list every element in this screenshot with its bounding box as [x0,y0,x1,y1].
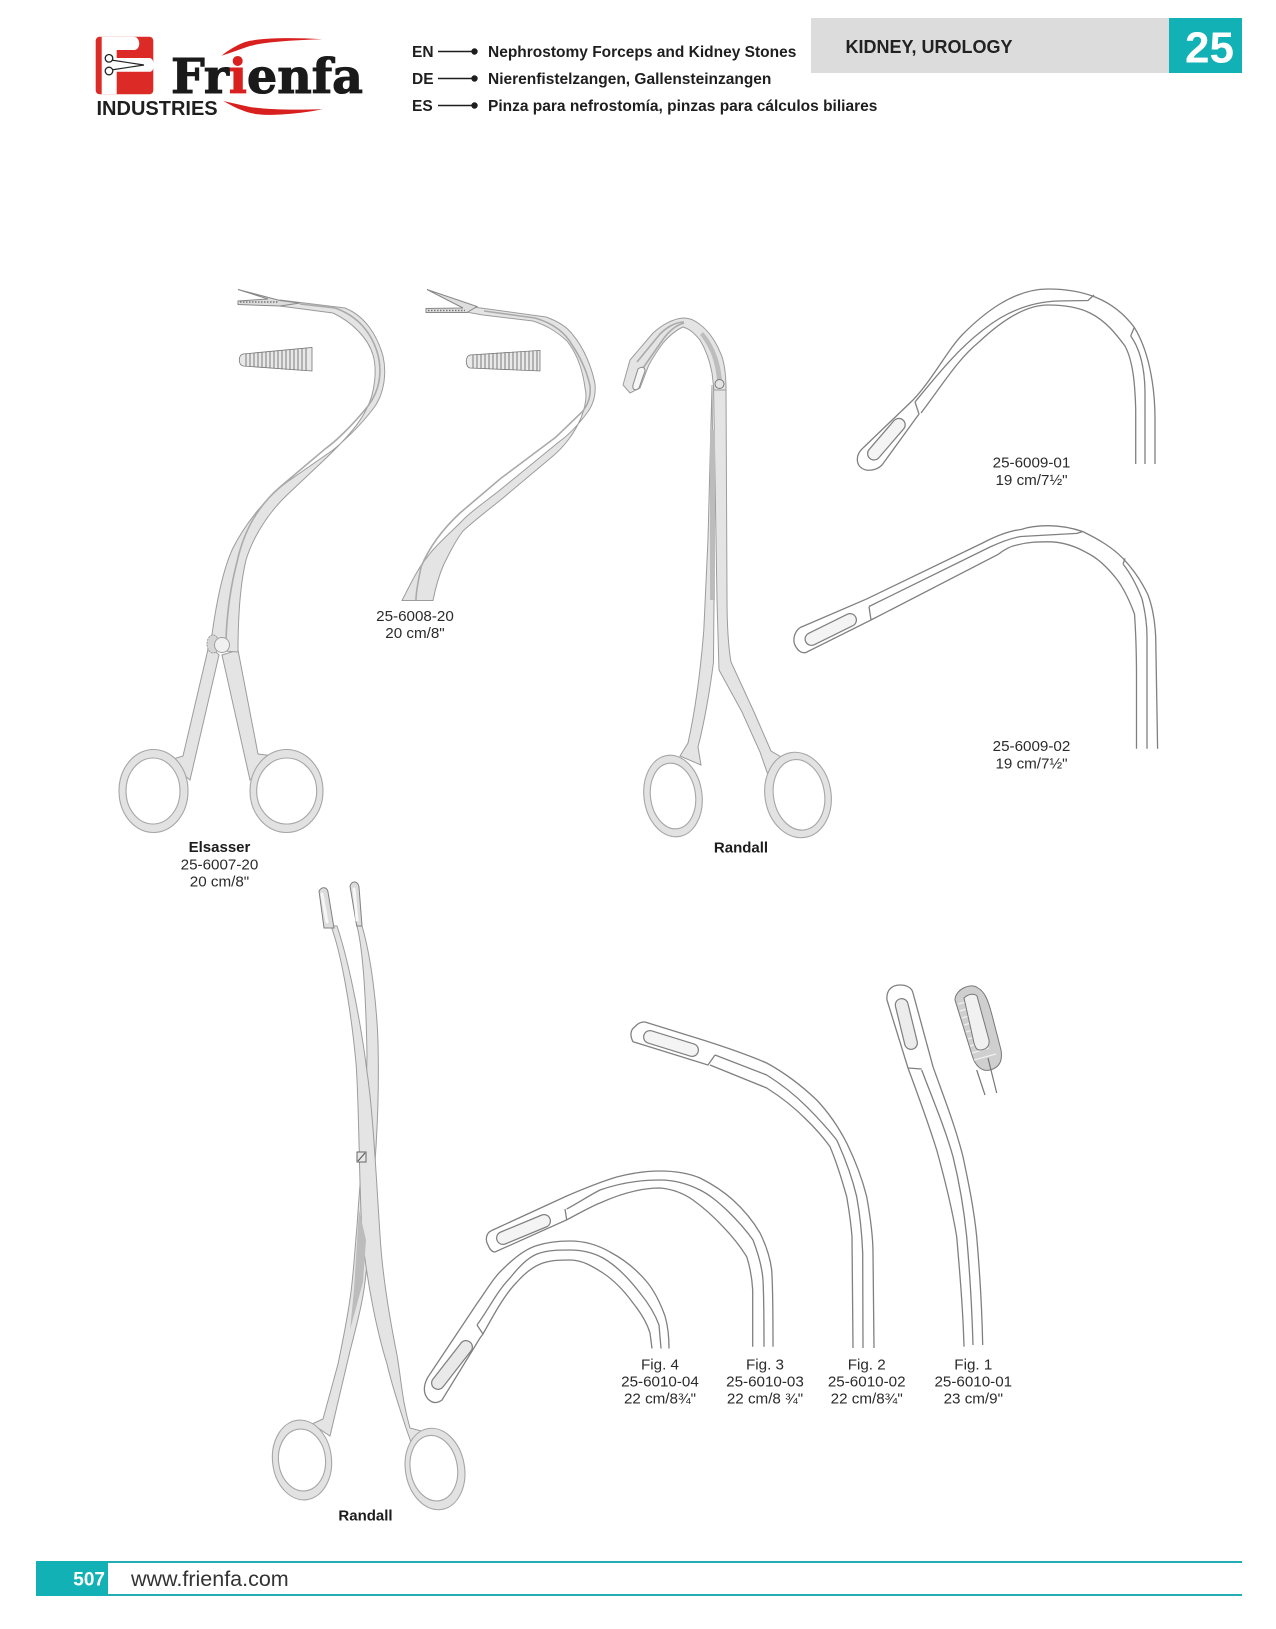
pivot screw [715,380,724,388]
right ring handle [250,750,323,832]
left ring handle [119,750,188,832]
chapter number tab: 25 [1185,24,1234,72]
footer [36,1561,1242,1596]
jaw: 25-6009-02 [794,526,1158,772]
left ring handle [268,1417,336,1503]
banner grey panel [811,18,1169,73]
jaw outline [794,526,1158,749]
label: Fig. 3: 25-6010-03 [726,1374,804,1390]
jaw outline [424,1241,669,1402]
right ring handle [399,1424,471,1514]
jaw: Fig. 1 [887,985,1012,1408]
label: 25-6009-01: 19 cm/7½" [995,472,1068,489]
instrument: Randall forceps (upper) [623,318,838,856]
label: Fig. 2: 22 cm/8¾" [831,1390,903,1408]
logo tagline: INDUSTRIES [96,98,218,120]
jaws [238,290,300,306]
label: Fig. 3 [726,1356,804,1408]
instrument: 25-6008-20 jaw [376,290,595,642]
label: 25-6008-20: 20 cm/8" [385,625,445,642]
footer rules [36,1561,1242,1596]
label: 25-6009-01: 25-6009-01 [993,454,1070,472]
label: 25-6009-02 [993,738,1070,772]
handle arms [170,645,275,780]
label: 25-6008-20 [376,608,454,642]
page number [36,1561,108,1596]
member to left ring [312,926,378,1436]
page number: 507 [73,1570,105,1590]
jaw slot [902,1005,911,1043]
jaw: Fig. 4 [424,1241,699,1408]
label: Fig. 1: 23 cm/9" [944,1390,1003,1408]
jaw slot [503,1221,544,1238]
label: Fig. 2: 25-6010-02 [828,1374,906,1390]
jaw slot [812,620,850,639]
title DE: DE [412,71,434,88]
website: www.frienfa.com [130,1567,289,1591]
logo icon: red F with scissors [96,37,154,94]
box lock screw [207,635,230,653]
logo: Frienfa Industries [96,37,363,120]
label: Fig. 4 [621,1356,699,1408]
label: Fig. 2 [828,1356,906,1408]
pivot screw [357,1152,366,1162]
serrated jaw detail [955,986,1001,1095]
section banner [811,18,1242,73]
jaw slot [874,425,899,454]
label: Fig. 1: Fig. 1 [954,1356,992,1374]
instrument: Elsasser forceps [119,290,385,890]
label: Randall: Randall [338,1508,393,1524]
jaws [426,290,477,312]
jaw: Fig. 3 [486,1171,804,1408]
banner heading: KIDNEY, UROLOGY [846,37,1013,57]
label: Randall: Randall [714,840,768,856]
language titles [412,44,877,115]
label: Fig. 1: 25-6010-01 [934,1374,1012,1390]
label: 25-6008-20: 25-6008-20 [376,608,454,625]
label: Fig. 1 [934,1356,1012,1408]
jaw: 25-6009-01 [857,289,1155,489]
jaw outline [857,289,1155,470]
label: Elsasser: Elsasser [189,839,251,856]
chapter number tab [1169,18,1242,73]
left tip [319,888,334,928]
shaft [210,300,385,652]
jaw serration detail [466,350,540,371]
label: Fig. 4: Fig. 4 [641,1356,679,1374]
jaw: Fig. 2 [631,1022,906,1408]
title ES: Pinza para nefrostomía, pinzas para cálculos biliares [488,98,877,115]
jaw slot [438,1347,466,1383]
title EN: Nephrostomy Forceps and Kidney Stones [488,44,796,61]
left ring handle [639,751,707,841]
member to right ring [331,926,425,1445]
label: 25-6009-02: 25-6009-02 [993,738,1070,755]
left arm [680,385,714,765]
label: Fig. 4: 22 cm/8¾" [624,1390,696,1408]
shaft shading [350,1210,366,1330]
label: 25-6009-02: 19 cm/7½" [995,756,1068,772]
title ES: ES [412,98,433,115]
label: 25-6009-01 [993,454,1070,489]
jaw serration detail [239,348,312,371]
instrument: Randall forceps (lower) [268,882,471,1524]
label: Elsasser [181,839,258,890]
label: Fig. 3: 22 cm/8 ¾" [727,1390,803,1408]
jaw slot [650,1037,692,1050]
shaft [402,306,595,600]
shaft shading [710,430,715,600]
label: Elsasser: 20 cm/8" [190,874,249,890]
jaw outline [486,1171,773,1347]
logo swoosh top [222,38,322,56]
label: Fig. 4: 25-6010-04 [621,1374,699,1390]
logo wordmark: Frienfa [171,49,363,105]
logo swoosh bottom [223,101,322,115]
title DE: Nierenfistelzangen, Gallensteinzangen [488,71,771,88]
label: Elsasser: 25-6007-20 [181,856,258,874]
title EN: EN [412,44,434,61]
curved hook [623,318,726,393]
label: Fig. 2: Fig. 2 [848,1356,886,1374]
label: Fig. 3: Fig. 3 [746,1356,784,1374]
right ring handle [758,747,838,843]
right arm [714,385,783,775]
jaw outline [887,985,983,1347]
right tip [350,882,362,926]
jaw outline [631,1022,874,1348]
